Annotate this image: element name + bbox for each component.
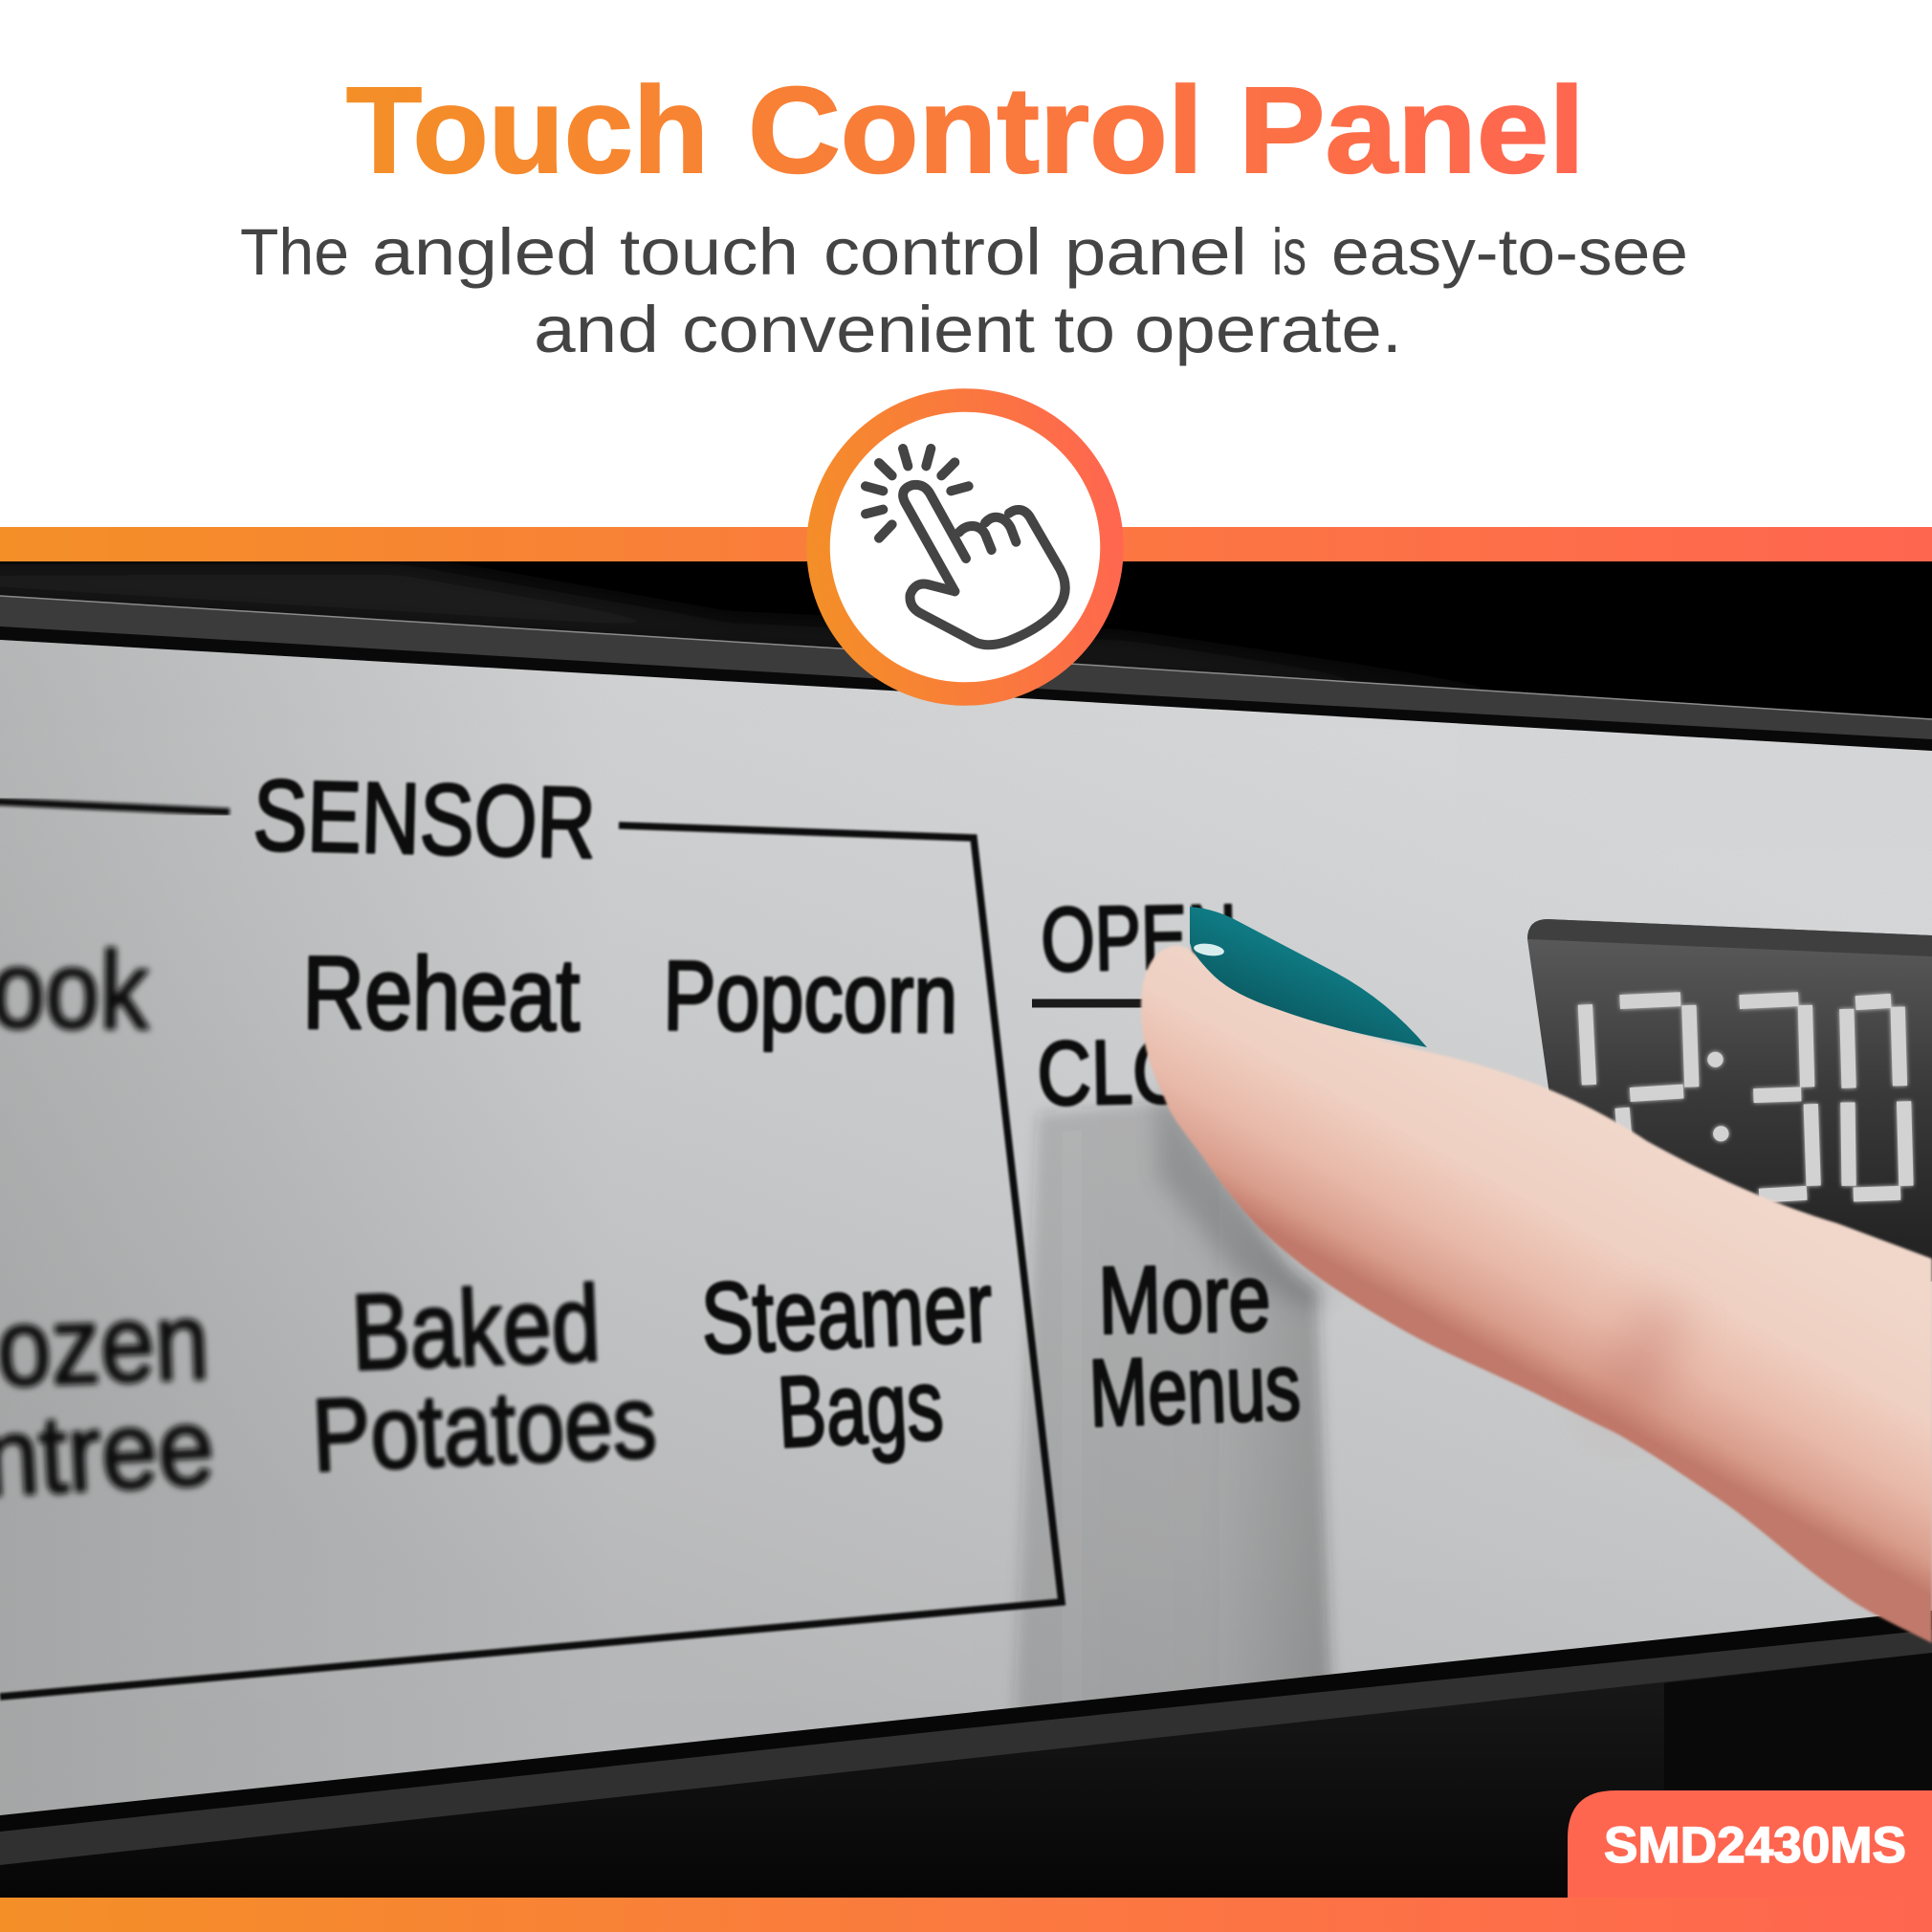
finger contact shadow [1157, 1081, 1329, 1310]
upper black trim [0, 626, 1932, 756]
top gradient bar [0, 527, 1932, 561]
subtitle text block: touch [620, 215, 799, 289]
sensor box outline [0, 801, 1062, 1697]
subtitle text block: easy-to-see [1331, 215, 1688, 289]
subtitle text block: panel [1065, 215, 1247, 289]
upper bezel haze [0, 564, 1569, 706]
icon: pointing hand [866, 449, 1065, 645]
nail [1190, 907, 1427, 1047]
ring [819, 400, 1111, 694]
bottom gradient bar [0, 1898, 1932, 1932]
lower bezel dark right part [1664, 1653, 1932, 1898]
subtitle text block: The [240, 215, 349, 289]
title: Panel [1239, 62, 1585, 199]
title: Touch [346, 62, 709, 199]
finger with nail [1141, 907, 1932, 1643]
display top band [1527, 919, 1932, 956]
panel: silver touch surface [0, 631, 1932, 1817]
label: Menus: Menus [1087, 1332, 1303, 1446]
label: OPEN: OPEN [1041, 886, 1238, 991]
model badge [1568, 1790, 1932, 1898]
panel surface [0, 631, 1932, 1817]
subtitle text block: convenient [682, 293, 1035, 366]
icon: touch hand in ring [819, 400, 1111, 694]
subtitle text block: angled [372, 215, 598, 289]
nail highlight [1193, 942, 1225, 957]
upper bezel light edge [0, 596, 1932, 719]
label: Popcorn: Popcorn [663, 940, 958, 1053]
label: Baked: Baked [349, 1263, 603, 1393]
label: Bags: Bags [775, 1349, 946, 1469]
subtitle text block: control [823, 215, 1042, 289]
label: Potatoes: Potatoes [310, 1363, 659, 1493]
upper bezel strip [0, 596, 1932, 739]
model number: SMD2430MS [1604, 1817, 1906, 1874]
title: Control [748, 62, 1203, 199]
clock display [1527, 919, 1932, 1282]
display body [1527, 919, 1932, 1282]
panel left vignette [0, 640, 409, 1815]
badge shape [1568, 1790, 1932, 1898]
knuckle crease [1592, 1292, 1690, 1434]
divider between open and close [1032, 999, 1262, 1008]
label: Frozen (cropped): ozen [0, 1280, 211, 1410]
subtitle text block: is [1272, 215, 1306, 289]
label: More: More [1097, 1244, 1271, 1353]
panel grain [0, 631, 1932, 1817]
subtitle text block: to [1054, 293, 1115, 366]
finger shadow [1014, 1100, 1331, 1731]
digits 12:30 [1585, 999, 1906, 1196]
label: Steamer: Steamer [699, 1251, 995, 1375]
label: SENSOR: SENSOR [252, 759, 597, 880]
label: CLOSE: CLOSE [1037, 1019, 1291, 1125]
lower bezel base [0, 1653, 1932, 1898]
subtitle text block: and [534, 293, 659, 366]
lower panel trim [0, 1609, 1932, 1832]
lower gray bezel strip [0, 1630, 1932, 1865]
photo: oven control panel with finger [0, 561, 1932, 1898]
label: Reheat: Reheat [302, 934, 581, 1052]
subtitle text block: operate. [1134, 293, 1402, 366]
photo background [0, 561, 1932, 1898]
subtitle text block [240, 215, 1688, 366]
finger [1141, 946, 1932, 1643]
